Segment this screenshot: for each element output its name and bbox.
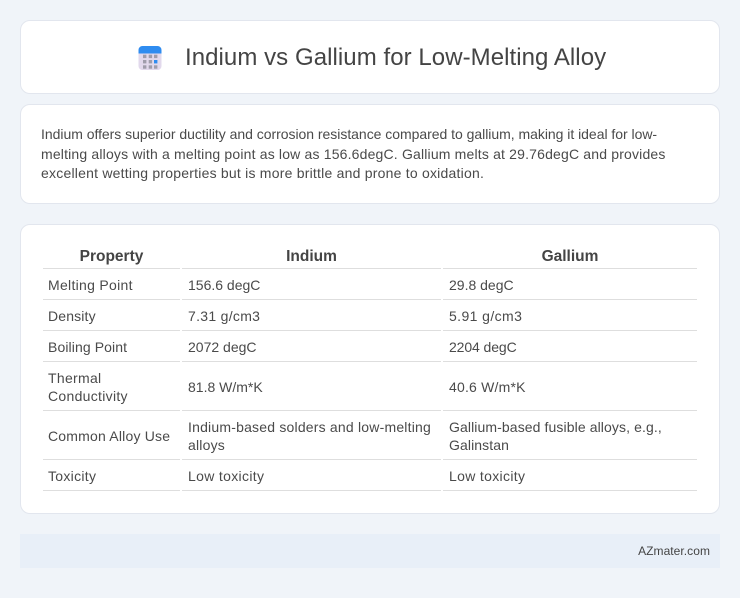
- row: Common Alloy Use: Common Alloy Use: [48, 428, 170, 444]
- row: Thermal Conductivity: [48, 370, 526, 404]
- row: Density: [48, 308, 522, 324]
- table header: Gallium: Gallium: [542, 248, 598, 265]
- table header: Property: Property: [80, 248, 143, 265]
- row: Common Alloy Use: [48, 419, 662, 453]
- footer bar: [20, 534, 720, 568]
- row: Common Alloy Use: Gallium-based fusible alloys, e.g.,: [449, 419, 662, 435]
- footer brand: AZmater.com: [638, 544, 710, 558]
- row: Boiling Point: [48, 339, 517, 355]
- row: Toxicity: Low toxicity: [449, 468, 525, 484]
- panel: comparison table: [20, 224, 720, 514]
- row: Common Alloy Use: Indium-based solders and low-melting: [188, 419, 431, 435]
- row: Melting Point: 156.6 degC: [188, 277, 260, 293]
- row: Boiling Point: 2204 degC: [449, 339, 517, 355]
- summary text: melting alloys with a melting point as low as 156.6degC. Gallium melts at 29.76degC and provides: [41, 146, 666, 162]
- row: Thermal Conductivity: 40.6 W/m*K: [449, 379, 526, 395]
- icon: calendar: [138, 46, 162, 70]
- summary text: [41, 126, 666, 181]
- row: Melting Point: [48, 277, 514, 293]
- row: Toxicity: [48, 468, 525, 484]
- summary text: excellent wetting properties but is more brittle and prone to oxidation.: [41, 165, 484, 181]
- row: Density: 5.91 g/cm3: [449, 308, 522, 324]
- row: Density: Density: [48, 308, 96, 324]
- row: Melting Point: Melting Point: [48, 277, 133, 293]
- row: Toxicity: Low toxicity: [188, 468, 264, 484]
- row: Melting Point: 29.8 degC: [449, 277, 514, 293]
- table header: Indium: Indium: [286, 248, 337, 265]
- panel: summary: [20, 104, 720, 204]
- row: Density: 7.31 g/cm3: [188, 308, 260, 324]
- row: Boiling Point: 2072 degC: [188, 339, 257, 355]
- panel: header: [20, 20, 720, 94]
- row: Boiling Point: Boiling Point: [48, 339, 127, 355]
- summary text: Indium offers superior ductility and corrosion resistance compared to gallium, making it ideal for low-: [41, 126, 657, 142]
- row: Thermal Conductivity: Conductivity: [48, 388, 128, 404]
- row: Common Alloy Use: alloys: [188, 437, 225, 453]
- row: Toxicity: Toxicity: [48, 468, 96, 484]
- row: Common Alloy Use: Galinstan: [449, 437, 509, 453]
- row: Thermal Conductivity: 81.8 W/m*K: [188, 379, 263, 395]
- row: Thermal Conductivity: Thermal: [48, 370, 101, 386]
- title: Indium vs Gallium for Low-Melting Alloy: [185, 44, 606, 71]
